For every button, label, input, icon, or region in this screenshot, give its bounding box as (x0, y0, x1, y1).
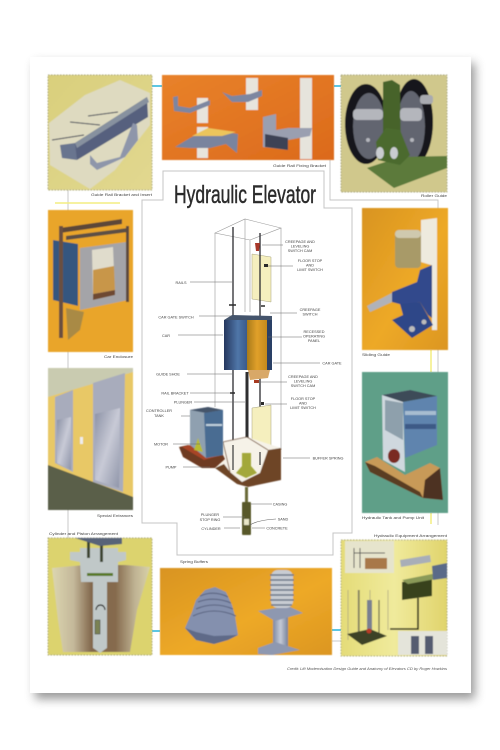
chart: hydraulic elevator cutaway: CREEPAGE AND (288, 375, 318, 379)
lower floor stop panel (252, 405, 271, 460)
chart: hydraulic elevator cutaway: AND (299, 402, 307, 406)
guide rails (233, 227, 260, 465)
chart: hydraulic elevator cutaway: CONTROLLER (146, 409, 172, 413)
chart: hydraulic elevator cutaway: LIMIT SWITCH (290, 406, 316, 410)
chart: hydraulic elevator cutaway: SWITCH CAM (288, 249, 312, 253)
plunger (246, 372, 248, 462)
rail brackets (229, 305, 265, 393)
chart: hydraulic elevator cutaway: LEVELING (294, 380, 312, 384)
chart: hydraulic elevator cutaway: AND (306, 264, 314, 268)
car (224, 315, 272, 383)
caption: Car Enclosure (104, 354, 133, 359)
chart: hydraulic elevator cutaway: PLUNGER (201, 513, 219, 517)
chart: hydraulic elevator cutaway: LIMIT SWITCH (297, 268, 323, 272)
chart: hydraulic elevator cutaway: RECESSED (304, 330, 325, 334)
chart: hydraulic elevator cutaway: CAR (162, 334, 170, 338)
panel: guide rail bracket and insert (48, 75, 153, 197)
chart: hydraulic elevator cutaway (146, 219, 343, 535)
chart: hydraulic elevator cutaway: SWITCH (303, 312, 318, 316)
labels: RAILS (176, 281, 187, 285)
icon: spring buffer on stand (258, 570, 303, 655)
panel: car enclosure (48, 210, 133, 359)
chart: hydraulic elevator cutaway: FLOOR STOP (291, 397, 316, 401)
connector lines (55, 86, 438, 641)
chart: hydraulic elevator cutaway: SAND (278, 518, 289, 522)
caption: Guide Rail Fixing Bracket (273, 163, 327, 168)
caption: Special Entrances (97, 513, 133, 518)
chart: hydraulic elevator cutaway: CASING (273, 502, 287, 506)
shaft outline (215, 219, 281, 450)
title: Hydraulic Elevator (174, 181, 316, 209)
panel: guide rail fixing bracket (162, 75, 334, 168)
caption: Cylinder and Piston Arrangement (49, 531, 119, 536)
caption: Sliding Guide (362, 352, 390, 357)
caption: Spring Buffers (180, 559, 208, 564)
caption: Hydraulic Equipment Arrangement (374, 533, 448, 538)
panel: sliding guide (362, 208, 448, 357)
caption: Guide Rail Bracket and Insert (91, 192, 153, 197)
chart: hydraulic elevator cutaway: OPERATING (303, 334, 325, 338)
panel: cylinder and piston arrangement (48, 531, 152, 655)
chart: hydraulic elevator cutaway: RAIL BRACKET (161, 392, 189, 396)
panel: hydraulic equipment arrangement (341, 533, 448, 656)
caption: Hydraulic Tank and Pump Unit (362, 515, 425, 520)
chart: hydraulic elevator cutaway: PANEL (308, 339, 320, 343)
poster shadow (35, 63, 475, 699)
chart: hydraulic elevator cutaway: FLOOR STOP (298, 259, 323, 263)
panel: hydraulic tank and pump unit (362, 372, 448, 520)
chart: hydraulic elevator cutaway: CYLINDER (201, 527, 221, 531)
chart: hydraulic elevator cutaway: CREEPAGE (300, 308, 321, 312)
poster sheet (30, 57, 471, 693)
chart: hydraulic elevator cutaway: CONCRETE (266, 526, 288, 530)
chart: hydraulic elevator cutaway: CREEPAGE AND (285, 240, 315, 244)
casing and cylinder (242, 487, 251, 535)
chart: hydraulic elevator cutaway: TANK (154, 414, 164, 418)
creepage cam (255, 243, 260, 251)
chart: hydraulic elevator cutaway: CAR GATE SWITCH (158, 316, 194, 320)
panel: spring buffers (160, 559, 332, 655)
tank unit (179, 407, 225, 468)
chart: hydraulic elevator cutaway: PLUNGER (174, 400, 192, 404)
panel: roller guide (341, 75, 447, 198)
chart: hydraulic elevator cutaway: MOTOR (154, 442, 168, 446)
pit (215, 437, 281, 487)
caption: Roller Guide (421, 193, 447, 198)
upper floor stop panel (252, 254, 271, 302)
chart: hydraulic elevator cutaway: LEVELING (291, 244, 309, 248)
chart: hydraulic elevator cutaway: BUFFER SPRING (313, 456, 343, 460)
leader lines (173, 245, 320, 528)
icon: conical buffer (185, 587, 238, 644)
credit line: Credit: Lift Modernisation Design Guide and Anatomy of Elevators CD by Roger Howkins (287, 666, 447, 671)
buffer spring and jack head (236, 453, 257, 478)
chart: hydraulic elevator cutaway: SWITCH CAM (291, 384, 315, 388)
panel: special entrances (48, 368, 133, 518)
chart: hydraulic elevator cutaway: STOP RING (200, 518, 220, 522)
upper switch (264, 264, 268, 267)
re-drawn rails in pit (233, 445, 260, 470)
chart: hydraulic elevator cutaway: PUMP (166, 466, 177, 470)
central diagram frame (142, 171, 352, 555)
chart: hydraulic elevator cutaway: GUIDE SHOE (156, 372, 180, 376)
chart: hydraulic elevator cutaway: CAR GATE (322, 362, 342, 366)
